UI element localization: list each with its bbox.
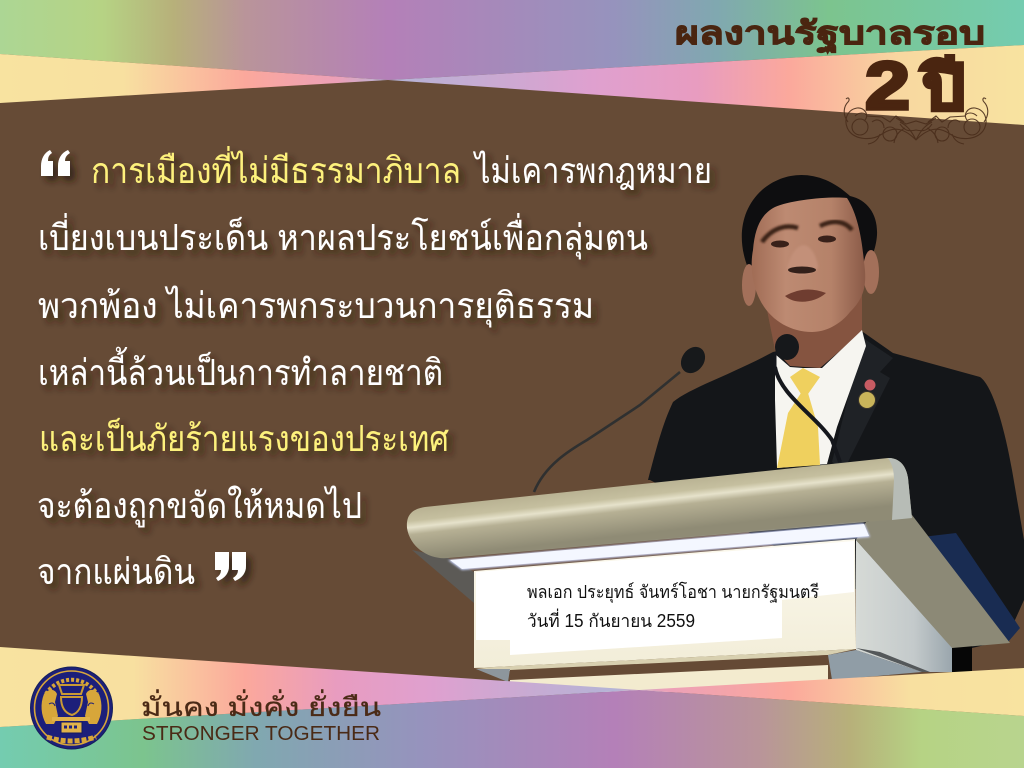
speaker credit: พลเอก ประยุทธ์ จันทร์โอชา นายกรัฐมนตรี [527, 581, 819, 603]
heading line 1: ผลงานรัฐบาลรอบ [675, 15, 985, 54]
quote line 1: การเมืองที่ไม่มีธรรมาภิบาล [91, 146, 461, 191]
face [752, 197, 865, 332]
headline: government results in 2 years [675, 15, 985, 124]
speaker credit: วันที่ 15 กันยายน 2559 [527, 608, 695, 631]
quote line 1 [91, 146, 712, 191]
quote line 3: พวกพ้อง ไม่เคารพกระบวนการยุติธรรม [38, 285, 594, 328]
heading numeral 2: 2 [865, 48, 910, 124]
quote line 7: จากแผ่นดิน [37, 551, 195, 592]
bottom colour band [0, 647, 1024, 768]
speaker's microphone [775, 334, 840, 462]
icon: government seal [30, 667, 112, 749]
quote line 6: จะต้องถูกขจัดให้หมดไป [37, 485, 362, 528]
lectern sloped edge [856, 515, 1010, 648]
shirt collar [775, 330, 866, 468]
lapel pins [858, 380, 876, 408]
quote line 2: เบี่ยงเบนประเด็น หาผลประโยชน์เพื่อกลุ่มตน [38, 213, 648, 260]
lectern front box [474, 539, 856, 668]
lectern lower shelf [474, 648, 930, 692]
hair [742, 175, 877, 272]
second microphone [534, 342, 710, 492]
lectern underside bracket [412, 550, 474, 603]
slogan Thai: มั่นคง มั่งคั่ง ยั่งยืน [141, 689, 381, 722]
quote line 4: เหล่านี้ล้วนเป็นการทำลายชาติ [38, 346, 443, 393]
quote line 1: ไม่เคารพกฎหมาย [472, 150, 712, 191]
speaker illustration [534, 175, 1024, 670]
lectern top cap [407, 458, 912, 558]
icon: floral ornament [844, 98, 988, 144]
opening quote mark [41, 150, 70, 176]
speaker credit [527, 581, 819, 631]
black pedestal leg [950, 640, 972, 672]
closing quote mark [215, 552, 246, 581]
slogan [141, 689, 381, 745]
quote line 5 highlighted: และเป็นภัยร้ายแรงของประเทศ [39, 416, 449, 459]
suit jacket [648, 332, 1024, 670]
glowing light strip [448, 523, 870, 570]
heading word years: ปี [919, 54, 965, 123]
neck [765, 290, 862, 368]
navy side panel [922, 533, 1020, 642]
quotation text block [37, 146, 712, 592]
slogan English: STRONGER TOGETHER [142, 723, 380, 745]
lectern [407, 458, 1020, 692]
top colour band [0, 0, 1024, 125]
name card [476, 541, 854, 655]
necktie [777, 368, 820, 468]
ears [742, 250, 879, 306]
lectern right side [856, 540, 952, 672]
facial features [762, 222, 852, 302]
lectern cap end [888, 458, 912, 520]
